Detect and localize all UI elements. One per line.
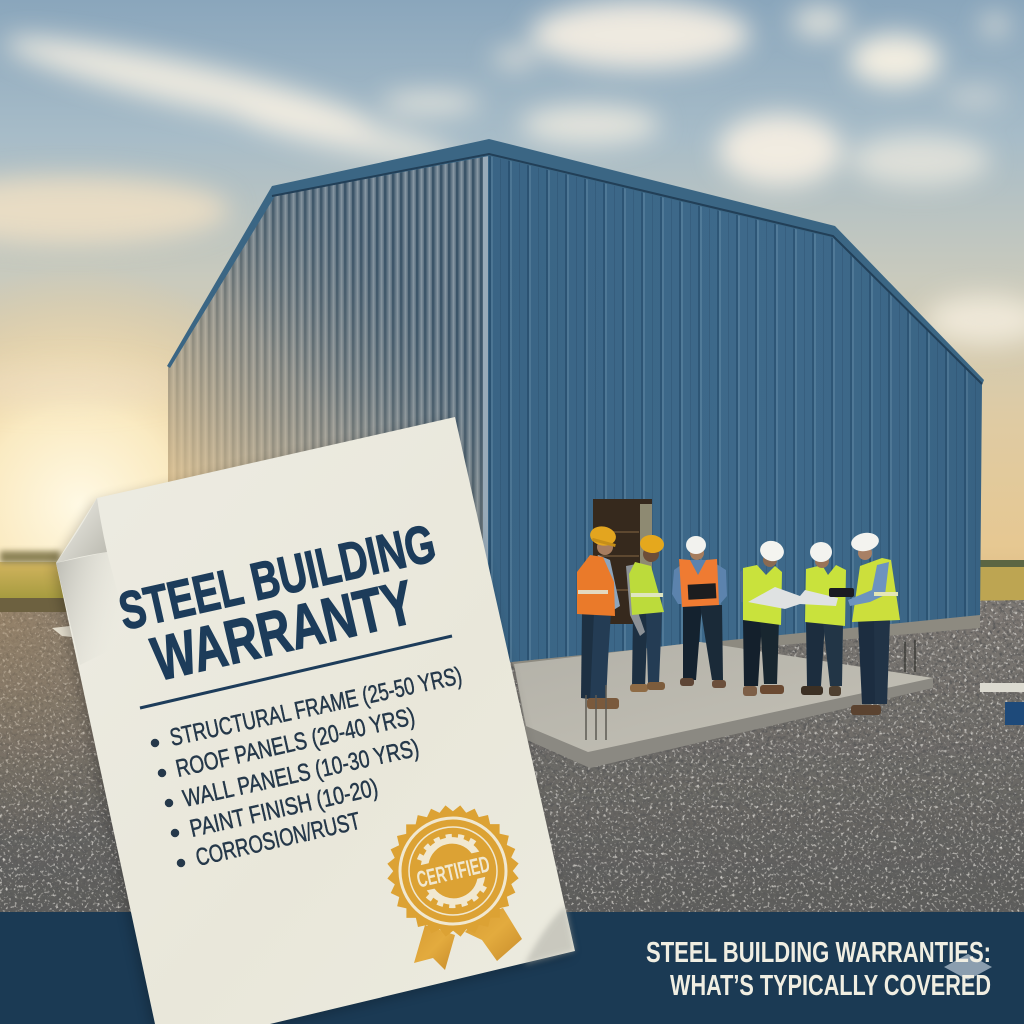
paper title: WARRANTY	[146, 568, 420, 695]
worker 2 yellow vest	[626, 534, 665, 692]
bottom band	[0, 912, 1024, 1024]
warranty paper	[56, 417, 575, 1024]
coverage list: STRUCTURAL FRAME (25-50 YRS)	[168, 662, 465, 752]
divider	[140, 636, 452, 708]
steel building	[167, 139, 984, 668]
coverage list: CORROSION/RUST	[193, 808, 363, 872]
paper title	[114, 514, 441, 695]
coverage list: WALL PANELS (10-30 YRS)	[180, 735, 422, 813]
worker 4 yellow vest	[740, 538, 786, 696]
coverage list: PAINT FINISH (10-20)	[187, 774, 381, 843]
left wall	[168, 152, 488, 565]
rebar	[586, 685, 606, 740]
workers group	[577, 524, 900, 715]
certified seal	[374, 792, 532, 970]
worker 1 orange vest	[577, 524, 620, 709]
certified seal: CERTIFIED	[414, 850, 492, 892]
gravel ground	[0, 600, 1024, 920]
paper title: STEEL BUILDING	[114, 514, 441, 642]
band title	[646, 937, 991, 1002]
paper shadow	[53, 421, 572, 1024]
roof edge	[167, 139, 984, 385]
concrete slab	[514, 642, 933, 768]
coverage list	[151, 662, 465, 872]
distant fields	[0, 551, 1024, 612]
door	[593, 499, 652, 624]
clipboard	[829, 588, 854, 597]
watermark diamond	[944, 954, 992, 980]
worker 3 orange vest tablet	[672, 536, 727, 688]
site props	[905, 640, 1024, 725]
lower right curl shading	[524, 905, 575, 965]
foundation line	[512, 615, 980, 668]
corner curl	[56, 498, 130, 665]
worker 5 yellow vest	[801, 542, 846, 696]
coverage list: ROOF PANELS (20-40 YRS)	[173, 703, 417, 783]
worker 6 yellow vest	[848, 531, 900, 715]
background sky	[0, 0, 1024, 620]
blueprint	[748, 587, 838, 609]
right wall	[483, 152, 982, 665]
